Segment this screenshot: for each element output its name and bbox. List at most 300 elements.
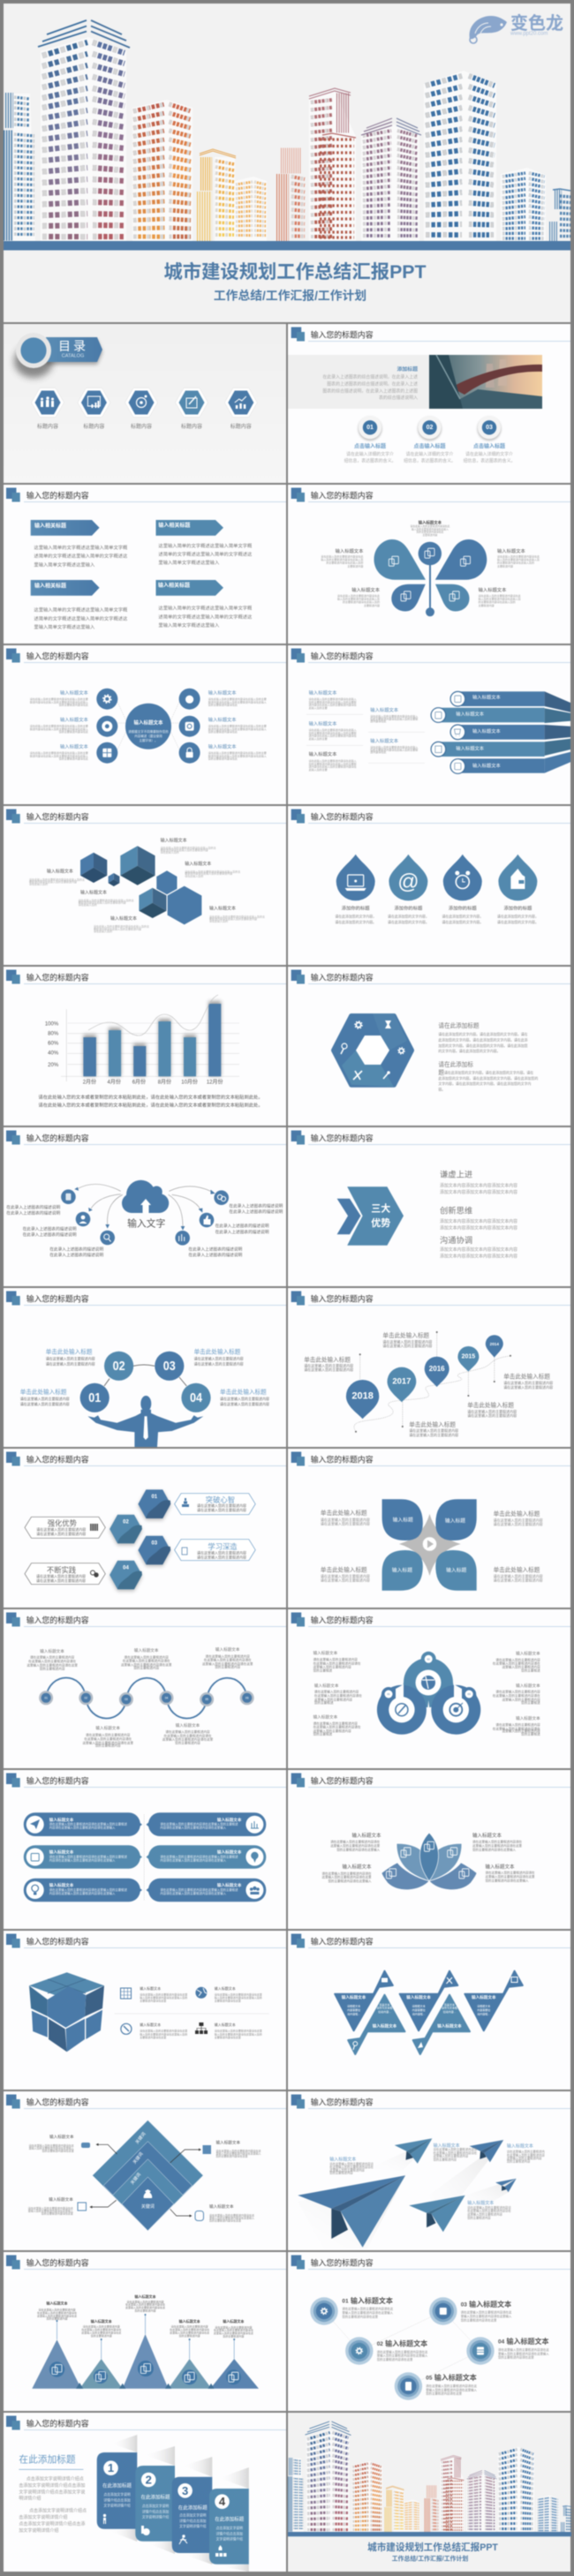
- text blocks: mountain labels: 这里输入您的主要叙述内容请在这: [81, 2330, 121, 2334]
- drop 2: at sign: 请在此添加您的文字内容，: [388, 915, 429, 918]
- card 3: [172, 2477, 212, 2553]
- text block: right column: 请在这里输入您的主要叙述内容: [495, 1690, 540, 1694]
- text blocks: wave labels: 这里输入您的主要叙述内容请在这里: [82, 1740, 133, 1744]
- pin 2018: [346, 1380, 379, 1419]
- text block: lotus labels right: 您的主要叙述内容请在这里输入: [472, 1847, 516, 1851]
- circle 02: 02: [113, 1359, 125, 1374]
- text block: left column: 请在此输入您的主要叙述内容请在此输入您的主要: [30, 750, 88, 755]
- node 05: 请在这里输入您的主要叙述内容请在这: [426, 2384, 478, 2388]
- text block: lower left: 的主要叙述内容请在此输入您的: [343, 599, 380, 604]
- text block: right column: 请在此输入您的主要叙述内容请在此输入您的主要: [208, 750, 267, 755]
- banner block 1: 述简单的文字概述这里输入简单的文字概述这: [34, 553, 128, 560]
- panel: layered diamond slide: [4, 2091, 286, 2250]
- point 02: 02: [427, 425, 433, 431]
- node 02: 里输入您的主要叙述内容请在这里输入: [377, 2354, 428, 2358]
- bar chart: 100%: [45, 1021, 59, 1027]
- item: calendar: 输入您的主要叙述内容请在这里输入您的: [140, 1995, 187, 2000]
- text block: left column: 述内容请在此输入您的主要叙述内容请在: [309, 734, 357, 738]
- text blocks: wave labels: 输入标题文本: [176, 1722, 200, 1729]
- text blocks: juggling labels: 请在这里输入您的主要叙述内容: [46, 1361, 95, 1367]
- text blocks: wave labels: 请在这里输入您的主要叙述内容: [30, 1655, 75, 1660]
- butterfly diagram: [374, 539, 487, 616]
- text block: lotus labels left: 这里输入您的主要叙述内容请在这里: [330, 1843, 381, 1848]
- item: compass: 请在这里输入您的主要叙述内容请在这里: [140, 2029, 187, 2033]
- text blocks: petal labels: 请在这里输入您的主要叙述内容: [494, 1577, 543, 1582]
- petal lower left: 输入标题: [392, 1566, 412, 1573]
- slide header: [291, 2094, 570, 2108]
- callout: lower right: 输入标题文本: [209, 2203, 234, 2210]
- item: globe: 输入您的主要叙述内容请在这里输入您的: [215, 1995, 262, 2000]
- text blocks: mountain labels: 输入标题文本: [46, 2301, 67, 2306]
- text block: middle column: 请在此输入您的主要叙述内容请在此输入: [370, 745, 418, 749]
- drop 2: at sign: 添加你的标题: [395, 904, 423, 911]
- text block: lotus labels right: 请在这里输入您的主要叙述内容请在: [486, 1871, 535, 1875]
- text blocks: mountain labels: 这里输入您的主要叙述内容请在这: [214, 2331, 253, 2335]
- text blocks: wave labels: 您的主要叙述内容: [175, 1740, 200, 1744]
- hexagon 04: [110, 1561, 142, 1591]
- node 02: [345, 2337, 428, 2365]
- text blocks: cube captions: 请在此输入您的: [161, 850, 179, 855]
- slide header: 输入您的标题内容: [311, 1937, 374, 1947]
- building: light orange tower: [236, 182, 266, 236]
- text blocks: plane labels: 这里输入您的主要叙述内容: [507, 2156, 542, 2160]
- pill: left row 3: 请在这里输入您的主要叙述内容请在这里输入您的主要叙述: [49, 1887, 128, 1892]
- text block: middle column: 您的主要叙述内容请在此输入您的主要叙: [370, 716, 418, 720]
- building facades backing: [13, 37, 546, 241]
- text block: photo caption: [322, 365, 418, 401]
- card 1: 在此添加标题: [102, 2482, 132, 2489]
- text blocks: cloud item descriptions: [6, 1202, 283, 1258]
- text block: right column: 这里输入您的主要叙述内容: [502, 1665, 540, 1669]
- pill: left row 1: [24, 1812, 142, 1836]
- panel: five concentric nodes slide: [288, 2252, 570, 2411]
- lozenge: keep practicing: 不断实践: [47, 1566, 76, 1575]
- point 01: 点击输入标题: [354, 443, 386, 450]
- banner block 4: [155, 580, 253, 629]
- text block: right column: 在这里输入您的主要叙述内容请在: [493, 1661, 540, 1666]
- dotted route and leader lines: [354, 1332, 510, 1432]
- text block: right column: 在这里输入您的主要叙述内容请在: [493, 1693, 540, 1698]
- text blocks: cube captions: 输入标题文本: [209, 905, 236, 911]
- drop 4: wallet: 添加你的标题: [504, 904, 532, 911]
- triangle: down 3: 动内容框...: [478, 2012, 490, 2016]
- text blocks: cloud item descriptions: 在此录入上述图表的描述说明: [215, 1223, 269, 1229]
- building: large tower: [38, 20, 130, 237]
- text block: upper right: [497, 547, 540, 569]
- text block: left column: 您的主要叙述内容请在此输入您的主要叙: [309, 699, 357, 704]
- text block: right column: 这里输入您的主要叙述内容: [502, 1729, 540, 1733]
- text block: lower left: 输入标题文本: [351, 586, 381, 593]
- text blocks: mountain labels: 请在这里输入您的主要叙述内容: [83, 2324, 120, 2329]
- text block: advantage 2: 添加文本内容添加文本内容添加文本内容: [440, 1218, 517, 1224]
- text blocks: mountain labels: 输入标题文本: [223, 2318, 244, 2324]
- point 03: 绍信息，表达图表的含义。: [464, 458, 515, 464]
- lotus diagram: [381, 1833, 477, 1890]
- banner block 3: [31, 580, 128, 630]
- text blocks: plane labels: 这里输入您的主要叙述内容: [467, 2211, 502, 2216]
- logo: www.ppt20.com: [510, 32, 548, 37]
- text block: right column: 叙述内容请在此输入您的主要叙述内容请在此输入: [208, 753, 267, 757]
- card 2: [135, 2466, 175, 2542]
- panel: hexagon cubes slide: [4, 806, 286, 965]
- node 03: [429, 2297, 512, 2325]
- text blocks: cube captions: 输入标题文本: [80, 890, 107, 896]
- triangle: down 1: 输入标题文本: [342, 1994, 366, 2000]
- text blocks: cloud item descriptions: 在此录入上述图表的描述说明: [23, 1232, 77, 1238]
- node 01: 里输入您的主要叙述内容请在这里输入: [342, 2310, 394, 2315]
- building: tall blue tower: [426, 76, 495, 235]
- triangle: down 2: 动内容框...: [412, 2012, 426, 2016]
- text block: middle column: 输入标题文本: [370, 706, 399, 713]
- slide header: [291, 487, 570, 501]
- point 02: [404, 416, 456, 464]
- drop 2: at sign: 请在此添加您的文字内容。: [388, 920, 429, 924]
- logo: 变色龙: [510, 12, 563, 34]
- panel: paper planes slide: [288, 2091, 570, 2250]
- point 01: [344, 416, 396, 464]
- text blocks: petal labels: 单击此处输入标题: [321, 1509, 367, 1517]
- text block: chart description: [38, 1094, 263, 1108]
- triangle: down 1: 动内容框...: [347, 2012, 360, 2016]
- layered diamond: 关键词: [134, 2131, 147, 2145]
- panel: trefoil diagram slide: [288, 1609, 570, 1768]
- leader end dots: [355, 1331, 511, 1433]
- text block: right column: [493, 1651, 540, 1736]
- text blocks: plane labels: 您的主要叙述内容: [507, 2158, 531, 2163]
- text block: middle column: 输入标题文本: [370, 737, 399, 744]
- text blocks: mountain labels: [37, 2294, 253, 2338]
- building: far left blue tower: [4, 97, 34, 235]
- text blocks: cloud item descriptions: 在此录入上述图表的描述说明: [229, 1202, 283, 1209]
- text block: advantage 1: 添加文本内容添加文本内容添加文本内容: [440, 1183, 517, 1188]
- triangle: up 2: 您是文本: [444, 2002, 455, 2007]
- text block: left column: 输入标题文本: [309, 719, 337, 727]
- text block: description: 点击添加文字说明详情介绍点: [29, 2508, 87, 2514]
- node 03: 里输入您的主要叙述内容请在这里输入: [461, 2314, 512, 2318]
- slide header: 输入您的标题内容: [311, 812, 374, 822]
- connector lines: [324, 2311, 480, 2386]
- text blocks: petal labels: 单击此处输入标题: [494, 1566, 540, 1573]
- point 01: 绍信息，表达图表的含义。: [344, 458, 396, 464]
- text block: lotus labels left: 您的主要叙述内容请在这里输入: [336, 1847, 381, 1851]
- text block: photo caption: 在此录入上述图表的综合描述说明，在此录入上述: [322, 374, 418, 380]
- slide header: 输入您的标题内容: [311, 2098, 374, 2107]
- text blocks: mountain labels: 您的主要叙述内容: [134, 2309, 156, 2313]
- text blocks: cloud item descriptions: 在此录入上述图表的描述说明: [49, 1247, 103, 1252]
- text blocks: cube captions: 请在此输入您的: [79, 902, 97, 907]
- card 2: 点击添加文字说明: [142, 2504, 169, 2508]
- ground band: [4, 241, 570, 251]
- text block: upper left: 的主要叙述内容请在此输入您的: [326, 561, 363, 565]
- slide header: 输入您的标题内容: [26, 812, 89, 822]
- node 01: 您的主要叙述内容请在这里: [342, 2314, 379, 2318]
- card 1: 文字说明详情介绍: [103, 2503, 131, 2507]
- text block: right column: 输入标题文本: [516, 1683, 540, 1689]
- pill: left row 2: [24, 1845, 142, 1869]
- text blocks: cube captions: 请在此输入您的: [29, 881, 48, 885]
- banner block 1: 里输入简单文字概述这里输入: [34, 561, 95, 568]
- bar chart: [45, 995, 239, 1086]
- slide header: 输入您的标题内容: [26, 491, 89, 501]
- point 02: 绍信息，表达图表的含义。: [404, 458, 456, 464]
- text blocks: wave labels: 这里输入您的主要叙述内容请在这里: [202, 1661, 253, 1666]
- text blocks: juggling labels: 单击此处输入标题: [46, 1347, 93, 1356]
- triangle: down 3: 输入标题文本: [472, 1994, 496, 2000]
- hub diagram: 内容阐述（建议使用: [134, 734, 162, 738]
- catalog item 3: [125, 388, 157, 430]
- slide header: [291, 1130, 570, 1144]
- text block: ring description 1: 加您的文字内容。请在此添加您的文字内容。请在此添加您: [438, 1043, 528, 1048]
- text blocks: plane labels: 请在这里输入您的主要叙述内容请: [467, 2205, 511, 2210]
- text blocks: mountain labels: 在这里输入您的主要叙述内容请在: [170, 2327, 209, 2331]
- text blocks: timeline labels: 单击此处输入标题: [409, 1420, 456, 1428]
- text block: left column: 叙述内容请在此输入您的主要叙述内容请在此输入: [30, 753, 88, 757]
- pin 2015: [457, 1346, 479, 1372]
- hub diagram: 输入标题文本: [133, 719, 163, 726]
- panel: four arrow banners slide: [4, 485, 286, 644]
- slide header: 输入您的标题内容: [26, 2098, 89, 2107]
- triangle: down 2: [400, 1971, 457, 2030]
- text blocks: wave labels: 请在这里输入您的主要叙述内容: [86, 1733, 131, 1737]
- text blocks: wave labels: 请在这里输入您的主要叙述内容: [125, 1654, 169, 1659]
- plane: small: [495, 2179, 517, 2192]
- panel: water drops slide: [288, 806, 570, 965]
- callout: lower left: [28, 2196, 117, 2215]
- panel: mountain triangles slide: [4, 2252, 286, 2411]
- node 04: 您的主要叙述内容请在这里: [498, 2355, 534, 2360]
- bar chart: 2月份: [83, 1079, 96, 1086]
- text blocks: cube captions: 输入标题文本: [47, 869, 73, 875]
- text block: left column: 此输入您的主要: [309, 705, 328, 710]
- arrows from cloud: [75, 1184, 215, 1230]
- icon: camera: [179, 716, 200, 737]
- circle 04: [181, 1383, 211, 1412]
- text block: left column: 输入标题文本: [309, 689, 337, 696]
- text block: right column: 请在此输入您的主要叙述内容请在此输入您的主要: [208, 724, 267, 728]
- text blocks: juggling labels: 请在这里输入您的主要叙述内容: [220, 1401, 269, 1406]
- callout: upper left: 请在这里输入您的主要叙述内容请在这: [29, 2143, 74, 2148]
- text blocks: timeline labels: 单击此处输入标题: [503, 1372, 550, 1381]
- layered diamond: 关键词: [129, 2172, 142, 2186]
- node 02: 请在这里输入您的主要叙述内容请在这: [377, 2349, 428, 2354]
- panel: hub and spokes slide: [4, 645, 286, 804]
- text blocks: plane labels: 在这里输入您的主要叙述内容: [507, 2152, 545, 2157]
- text blocks: cloud item descriptions: 在此录入上述图表的描述说明: [229, 1209, 283, 1215]
- text blocks: plane labels: 您的主要叙述内容: [434, 2158, 457, 2162]
- text block: right column: 您的主要叙述内容请在此: [208, 729, 238, 734]
- arc connector: [104, 1365, 186, 1386]
- text block: left column: [309, 689, 357, 772]
- text blocks: juggling labels: 单击此处输入标题: [20, 1388, 67, 1396]
- text block: photo caption: 表的综合描述说明入: [379, 395, 418, 401]
- wave nodes: 02: [85, 1696, 87, 1699]
- lozenge: breakthrough: 请在这里输入您的主要叙述内容: [197, 1507, 246, 1512]
- text blocks: wave labels: 您的主要叙述内容: [40, 1666, 65, 1670]
- slide header: [6, 487, 286, 501]
- card 3: 详情介绍点击添加: [179, 2519, 207, 2523]
- text block: left column: 请在此输入您的主要叙述内容请在此输入您的主要: [30, 697, 88, 701]
- text blocks: plane labels: 在这里输入您的主要叙述内容请在: [467, 2208, 511, 2212]
- text block: right column: 输入标题文本: [516, 1715, 540, 1721]
- text block: advantage 1: [440, 1170, 517, 1195]
- hub diagram: 主题字体）。: [140, 738, 157, 742]
- slide header: [6, 1451, 286, 1465]
- panel: hexagon ring slide: [288, 967, 570, 1126]
- drop 2: at sign: [388, 855, 429, 924]
- card 1: 点击添加文字说明: [103, 2492, 131, 2497]
- point 03: 03: [486, 425, 493, 431]
- text block: left column: 输入标题文本: [313, 1714, 338, 1720]
- text blocks: plane labels: 请在这里输入您的主要叙述内: [507, 2150, 545, 2154]
- icon: lock: [179, 742, 200, 764]
- text blocks: mountain labels: 您的主要叙述内容: [91, 2333, 112, 2338]
- slide header: 输入您的标题内容: [26, 973, 89, 983]
- text block: lower left: 输入您的主要叙述内容请在此输入您: [337, 596, 380, 600]
- text block: upper left: 主要叙述内容: [347, 564, 363, 569]
- text block: photo caption: 图表的上述图表的综合描述说明。在此录入上述: [327, 381, 418, 387]
- text block: left column: 述内容请在此输入您的主要叙述内容请在: [309, 765, 357, 769]
- building: right edge blue tower: [549, 189, 570, 237]
- star center with play: [399, 1514, 461, 1576]
- callout: lower right: 里输入您的主要叙述内容请在这里输入: [209, 2215, 254, 2219]
- text block: left column: 输入标题文本: [313, 1650, 338, 1656]
- lozenge: breakthrough: [175, 1494, 255, 1515]
- plane: lower middle: [409, 2196, 465, 2232]
- lozenge: keep practicing: 请在这里输入您的主要叙述内容: [36, 1573, 86, 1578]
- card 4: 详情介绍点击添加: [216, 2531, 243, 2535]
- text block: middle column: 请在此输入您的主要叙述内容请在此输入: [370, 714, 418, 719]
- text block: right column: [208, 689, 267, 760]
- text block: left column: 此输入您的主要: [309, 736, 328, 741]
- triangle: down 3: 请根据文本: [477, 2004, 490, 2008]
- slide header: 输入您的标题内容: [311, 1294, 374, 1304]
- text blocks: cloud item descriptions: 在此录入上述图表的描述说明: [6, 1209, 61, 1216]
- petal lower right: [435, 1550, 477, 1591]
- banner block 2: 里输入简单文字概述这里输入: [158, 559, 220, 566]
- heading: closing subtitle: 工作总结/工作汇报/工作计划: [392, 2555, 468, 2562]
- text block: advantage 2: 创新思维: [440, 1206, 472, 1216]
- callout: lower left: 您的主要叙述内容请在这里: [42, 2211, 73, 2215]
- banner block 1: [31, 520, 128, 568]
- text blocks: juggling labels: 单击此处输入标题: [194, 1347, 241, 1356]
- node 05: 里输入您的主要叙述内容请在这里输入: [426, 2387, 478, 2391]
- text block: upper left: 请在此输入您的主要叙述内容请在此: [321, 554, 363, 559]
- bar chart: 12月份: [207, 1079, 223, 1086]
- text blocks: cloud item descriptions: 在此录入上述图表的描述说明: [188, 1252, 243, 1258]
- panel: timeline pins slide: [288, 1288, 570, 1447]
- text block: right column: 您的主要叙述: [521, 1732, 540, 1736]
- panel: cloud diagram slide: [4, 1127, 286, 1286]
- triangle: up 1: [348, 1995, 404, 2054]
- text block: top: 输入您的主要叙述内容请在此输入: [412, 527, 449, 531]
- text blocks: mountain labels: 在这里输入您的主要叙述内容请在: [81, 2327, 121, 2331]
- heading: cover subtitle: 工作总结/工作汇报/工作计划: [214, 288, 366, 302]
- text block: left column: 输入标题文本: [60, 716, 88, 723]
- text block: advantage 2: [440, 1206, 517, 1231]
- slide header: 输入您的标题内容: [26, 1294, 89, 1304]
- lozenge: strengthen advantage: 请在这里输入您的主要叙述内容: [36, 1531, 86, 1536]
- point 02: 请在此输入详细的文字介: [406, 451, 454, 457]
- slide header: 输入您的标题内容: [26, 2419, 89, 2429]
- banner block 2: 输入相关标题: [158, 522, 190, 529]
- catalog badge: 目录: [58, 339, 88, 353]
- catalog item 1: 标题内容: [37, 423, 58, 430]
- text block: advantage 1: 添加文本内容添加文本内容添加文本内容: [440, 1189, 517, 1195]
- item: globe: 请在这里输入您的主要叙述内容请在这里: [215, 1992, 262, 1997]
- node 03: 请在这里输入您的主要叙述内容请在这: [461, 2310, 512, 2315]
- slide header: 输入您的标题内容: [26, 2258, 89, 2268]
- card 3: 在此添加标题: [178, 2504, 208, 2511]
- petal upper right: [435, 1499, 477, 1540]
- drop 3: alarm clock: 请在此添加您的文字内容。: [442, 920, 483, 924]
- text blocks: petal labels: 请在这里输入您的主要叙述内容: [321, 1577, 370, 1582]
- text block: left column: 这里输入您的主要叙述内容: [313, 1729, 351, 1733]
- text blocks: petal labels: 请在这里输入您的主要叙述内容: [321, 1573, 370, 1578]
- point 03: [464, 416, 515, 464]
- text blocks: plane labels: 请在这里输入您的主要叙述内容请: [329, 2162, 374, 2166]
- trefoil shape: 01: [387, 1692, 390, 1696]
- slide header: 输入您的标题内容: [311, 330, 374, 340]
- building: yellow tower: [197, 149, 236, 235]
- text block: description: 击添加文字说明详情介绍: [19, 2514, 67, 2520]
- slide header: [291, 648, 570, 662]
- pill: left row 3: 内容请在这里输入您的主要叙述内容请在这里输入: [49, 1891, 116, 1895]
- text block: top: 您的主要叙述内容请在此: [417, 531, 443, 534]
- text blocks: cloud item descriptions: 在此录入上述图表的描述说明: [49, 1252, 103, 1258]
- text blocks: wave labels: 这里输入您的主要叙述内容请在这里: [26, 1662, 78, 1667]
- text block: middle column: 您的主要叙述内容请在此输入您的主要叙: [370, 747, 418, 751]
- text blocks: mountain labels: 请在这里输入您的主要叙述内容: [215, 2324, 252, 2329]
- text block: photo caption: 添加标题: [397, 365, 418, 373]
- triangle: up 2: 拉动内容...: [443, 2009, 456, 2014]
- text blocks: mountain labels: 您的主要叙述内容: [179, 2333, 200, 2338]
- pill: right row 3: 输入标题文本: [217, 1882, 242, 1888]
- slide header: 输入您的标题内容: [311, 2258, 374, 2268]
- text block: right column: 请在此输入您的主要叙述内容请在此输入您的主要: [208, 697, 267, 701]
- text block: description: 点击添加文字说明详情介绍点击添: [19, 2520, 85, 2527]
- text block: left column: 输入标题文本: [60, 742, 88, 749]
- pill: left row 2: 请在这里输入您的主要叙述内容请在这里输入您的主要叙述: [49, 1854, 128, 1858]
- text block: top: 输入标题文本: [419, 519, 442, 526]
- text block: right column: 您的主要叙述: [521, 1668, 540, 1672]
- item: org chart: [195, 2022, 262, 2039]
- item: org chart: 输入您的主要叙述内容请在这里输入您的: [215, 2031, 262, 2036]
- text block: ring description 2: [438, 1060, 538, 1091]
- text block: ring description 2: 此添加您的文字内容。请在此添加您的文字内容。请在此添加您的: [438, 1076, 538, 1081]
- node 02: 02 输入标题文本: [377, 2339, 427, 2348]
- text blocks: cube captions: 请在此输入您的主要叙述内容请在此输入您的主: [185, 869, 240, 873]
- banner block 4: 里输入简单文字概述这里输入: [158, 621, 220, 629]
- text blocks: timeline labels: 请在这里输入您的主要叙述内容: [467, 1409, 517, 1414]
- ribbon chart: 输入标题文本: [472, 694, 501, 701]
- text blocks: timeline labels: 请在这里输入您的主要叙述内容: [467, 1412, 517, 1418]
- text blocks: cloud item descriptions: 在此录入上述图表的描述说明: [215, 1229, 269, 1235]
- cube and hexagon cluster: [80, 846, 202, 925]
- text block: advantage 3: 沟通协调: [440, 1235, 472, 1245]
- text block: left column: 您的主要叙述: [314, 1700, 334, 1705]
- pill: left row 2: 输入标题文本: [49, 1849, 74, 1856]
- slide header: [291, 1451, 570, 1465]
- panel: slide photo and three points: [288, 324, 570, 483]
- wave nodes: [39, 1691, 254, 1706]
- point 03: 点击输入标题: [473, 443, 505, 450]
- text blocks: cube captions: 请在此输入您的主要叙述内容请在此输入您的主: [161, 846, 216, 850]
- circle 03: [155, 1352, 184, 1381]
- petal upper left: 输入标题: [393, 1516, 413, 1523]
- lozenge: strengthen advantage: [25, 1517, 105, 1538]
- text blocks: petal labels: 请在这里输入您的主要叙述内容: [321, 1520, 370, 1525]
- callout: upper right: 输入标题文本: [215, 2140, 240, 2145]
